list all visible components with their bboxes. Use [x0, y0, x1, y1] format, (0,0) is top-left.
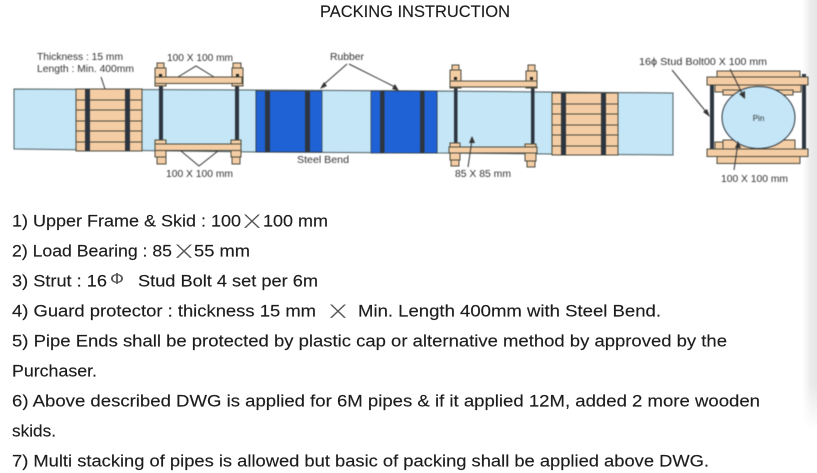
item 6 continued: skids.: [12, 422, 56, 440]
item 6: 6) Above described DWG is applied for 6M pipes & if it applied 12M, added 2 more wooden: [12, 392, 760, 410]
instruction list: [12, 212, 760, 470]
pipe body: [14, 89, 673, 155]
label: lower frame section: 100 X 100 mm: [721, 174, 788, 185]
label: guard thickness: [37, 52, 134, 89]
guard protector right: [552, 93, 618, 155]
item 2: 55 mm: [194, 242, 250, 260]
item 4: [12, 302, 661, 320]
label: lower frame left: [166, 151, 233, 180]
item 4: Min. Length 400mm with Steel Bend.: [358, 302, 661, 320]
item 3: [12, 270, 318, 290]
label: stud bolt: 16ϕ Stud Bolt: [639, 57, 704, 68]
label: guard thickness: Length : Min. 400mm: [37, 64, 134, 75]
item 1: [12, 212, 328, 230]
label: guard thickness: Thickness : 15 mm: [37, 52, 123, 63]
item 3: Φ: [110, 270, 124, 288]
guard protector left: [76, 89, 142, 151]
rubber: left steel bend: [256, 91, 322, 152]
label: load bearing: [455, 136, 511, 180]
item 2: ╳: [175, 244, 193, 258]
label: rubber with arrows: Rubber: [330, 52, 365, 63]
packing diagram: side view and section: [14, 52, 808, 185]
label: lower frame left: 100 X 100 mm: [166, 169, 233, 180]
item 3: 3) Strut : 16: [12, 272, 107, 290]
item 5 continued: Purchaser.: [12, 362, 97, 380]
left frame with skids and struts: [155, 63, 243, 164]
item 1: 100 mm: [263, 212, 328, 230]
end section view with pin: [707, 71, 808, 164]
label: rubber with arrows: [320, 52, 399, 91]
page edge shadow: [802, 0, 817, 430]
label: load bearing: 85 X 85 mm: [455, 169, 511, 180]
rubber: right steel bend: [371, 91, 437, 153]
item 4: ╳: [329, 304, 347, 318]
label: steel bend: Steel Bend: [297, 155, 349, 166]
item 4: 4) Guard protector : thickness 15 mm: [12, 302, 316, 320]
item 5: 5) Pipe Ends shall be protected by plastic cap or alternative method by approved by the: [12, 332, 727, 350]
item 3: Stud Bolt 4 set per 6m: [138, 272, 318, 290]
label: stud bolt: [639, 57, 710, 117]
label: lower frame section: [721, 141, 788, 185]
label: upper frame left: 100 X 100 mm: [167, 53, 233, 64]
pin circle: Pin: [753, 114, 764, 123]
label: upper frame section: [704, 57, 767, 99]
right frame with skids and struts: [449, 65, 537, 167]
item 2: [12, 242, 250, 260]
label: upper frame left: [167, 53, 233, 77]
title: PACKING INSTRUCTION: [320, 2, 510, 21]
item 1: ╳: [243, 214, 261, 228]
item 1: 1) Upper Frame & Skid : 100: [12, 212, 241, 230]
item 2: 2) Load Bearing : 85: [12, 242, 172, 260]
item 7: 7) Multi stacking of pipes is allowed but basic of packing shall be applied above DWG.: [12, 452, 709, 470]
label: upper frame section: 00 X 100 mm: [704, 57, 767, 68]
